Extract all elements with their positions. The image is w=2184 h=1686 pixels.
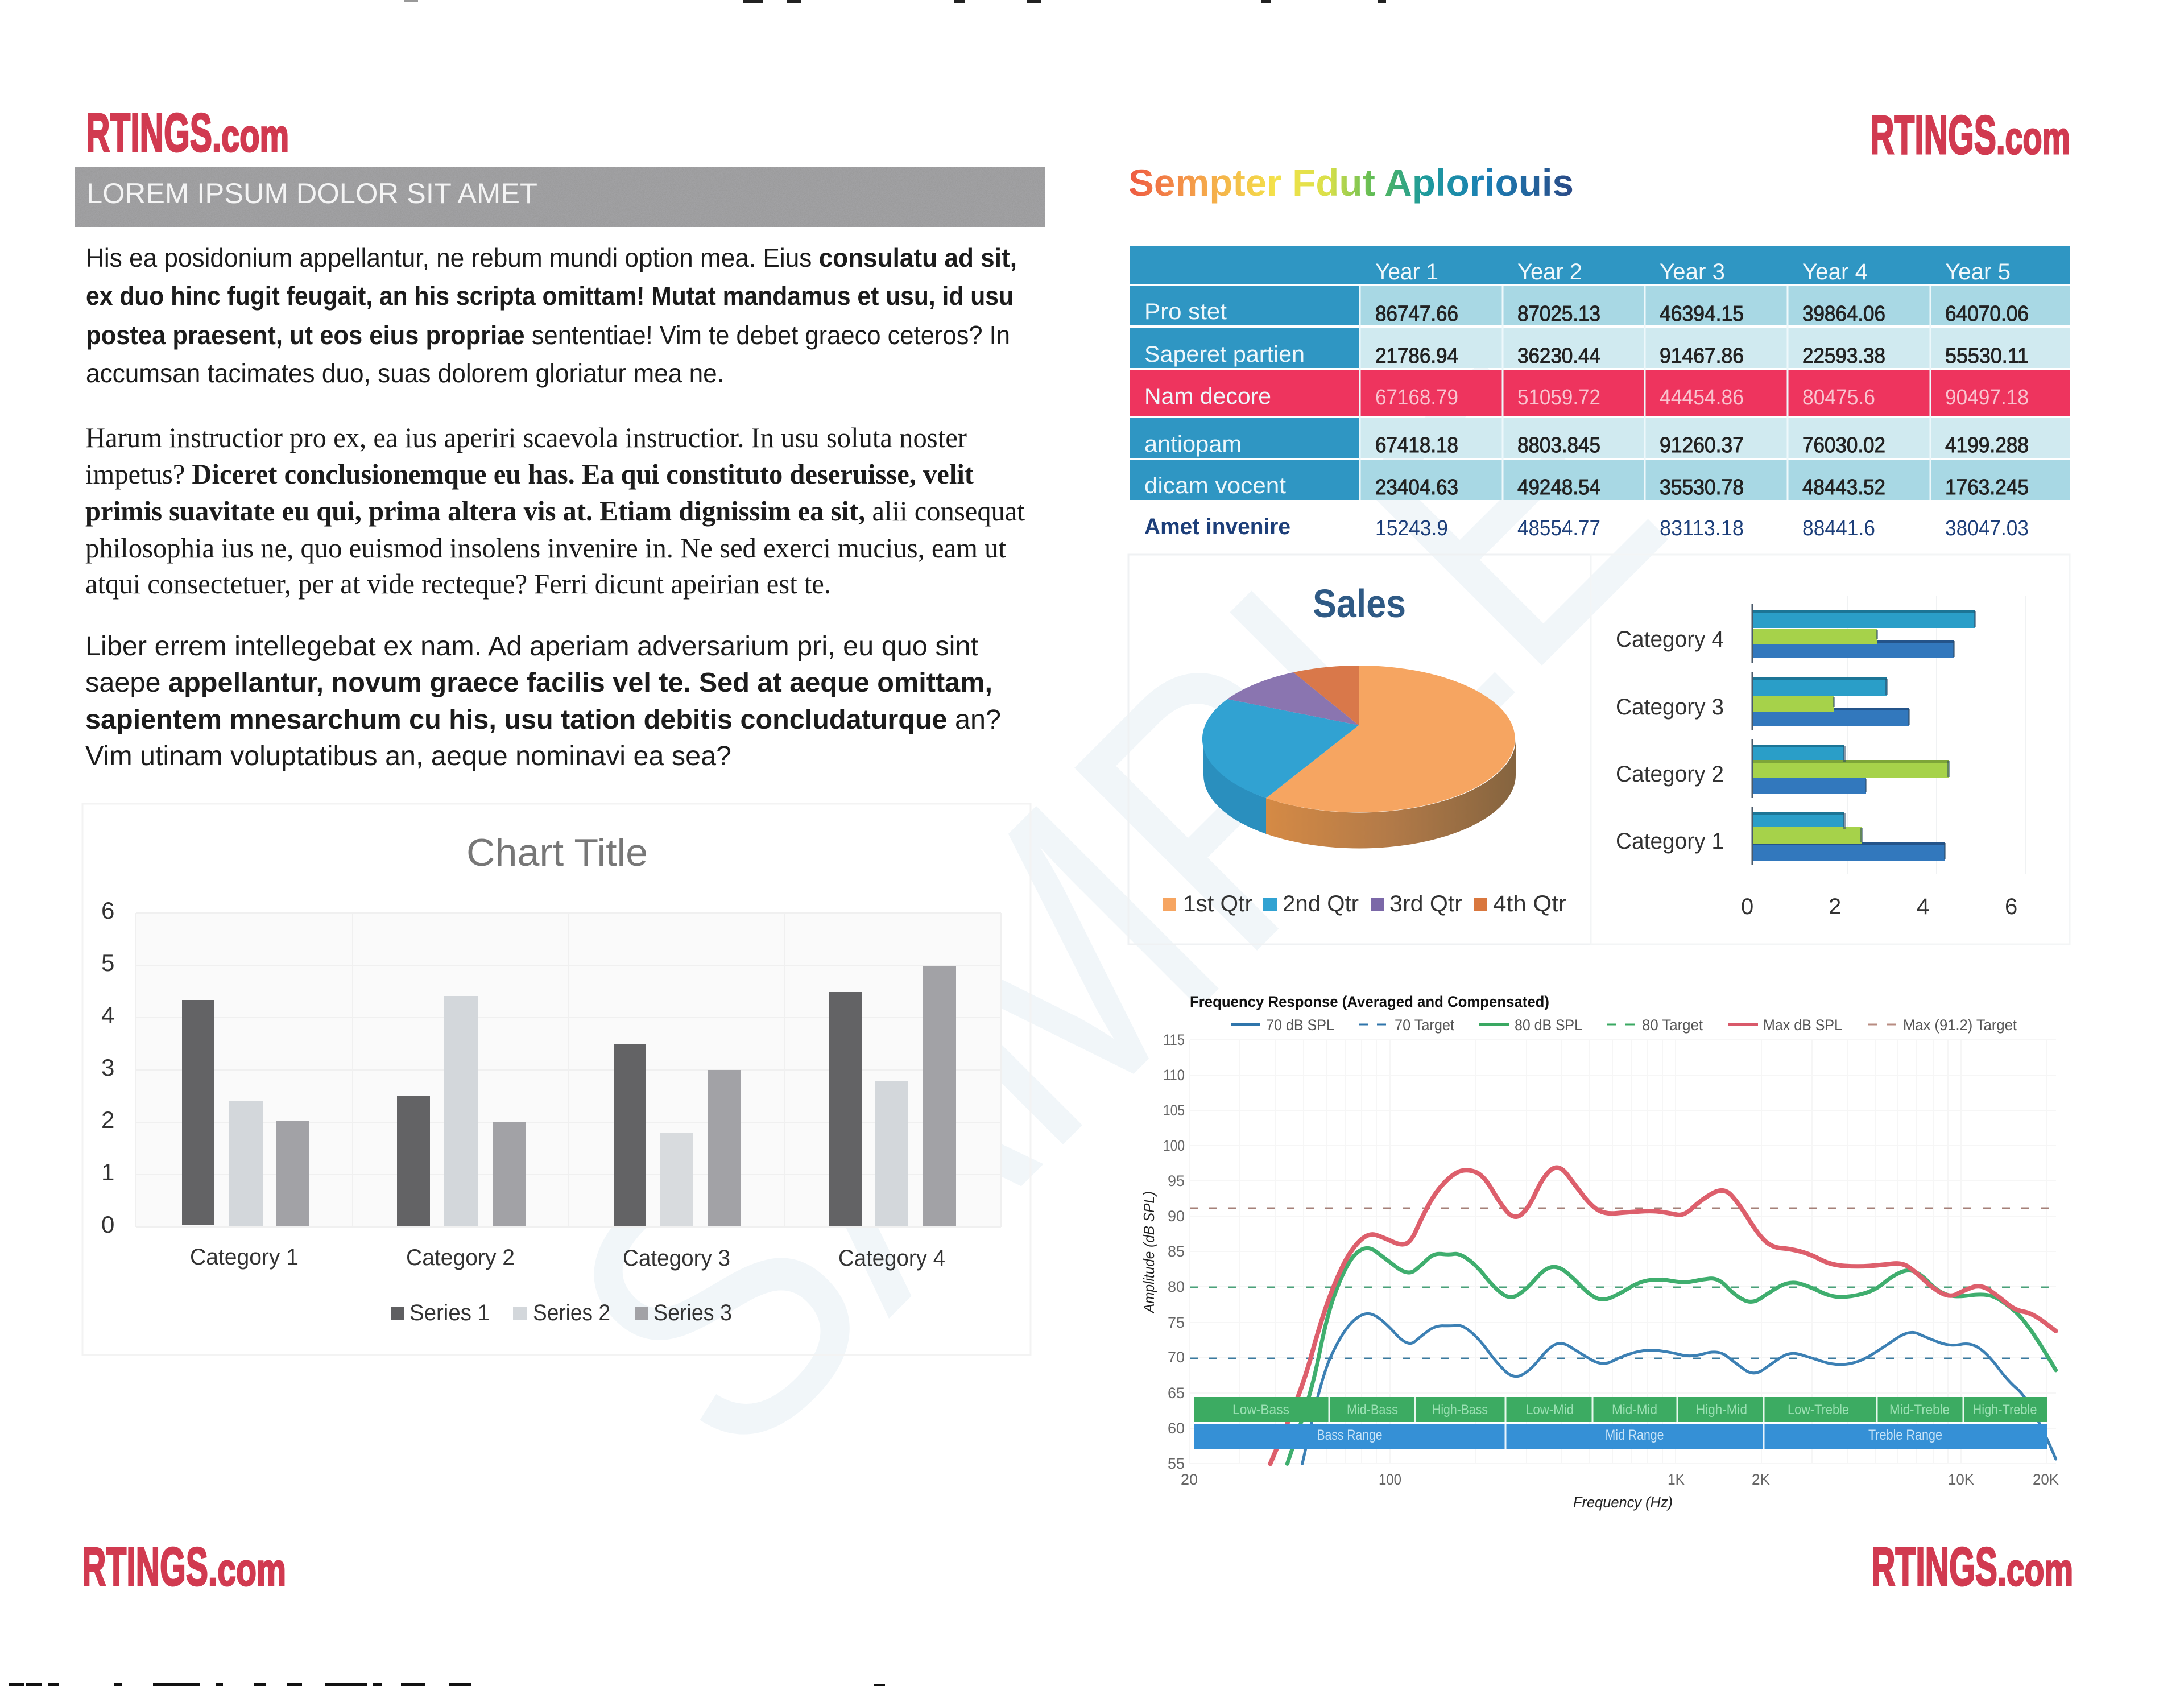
row: Amet invenire: 15243.9 bbox=[1375, 516, 1448, 540]
range band: sub-ranges: Mid-Treble bbox=[1889, 1402, 1950, 1418]
y axis labels: 115 bbox=[1163, 1031, 1185, 1048]
pie title: Sales bbox=[1313, 581, 1406, 626]
y axis labels: 0 bbox=[101, 1211, 114, 1238]
row: Saperet partien: 36230.44 bbox=[1517, 344, 1600, 368]
category labels: Category 1 bbox=[1616, 829, 1724, 854]
pie graphic bbox=[1202, 666, 1516, 848]
header row: Year 4 bbox=[1802, 259, 1868, 284]
row: Nam decore: 51059.72 bbox=[1517, 386, 1600, 410]
x axis labels: 1K bbox=[1668, 1471, 1685, 1488]
panel: grey column chart bbox=[82, 804, 1031, 1355]
plot background and grid bbox=[136, 913, 1001, 1227]
y axis labels: 105 bbox=[1163, 1102, 1185, 1119]
row: dicam vocent: 48443.52 bbox=[1802, 476, 1885, 499]
x axis labels: 2 bbox=[1829, 894, 1841, 919]
columns bbox=[182, 966, 956, 1226]
y axis labels: 5 bbox=[101, 949, 114, 976]
panel: sales pie chart bbox=[1128, 555, 1591, 944]
row: dicam vocent: 49248.54 bbox=[1517, 476, 1600, 499]
range band: main ranges: Treble Range bbox=[1868, 1427, 1942, 1443]
range band: sub-ranges: High-Mid bbox=[1696, 1402, 1747, 1418]
range band: sub-ranges: Low-Mid bbox=[1526, 1402, 1574, 1418]
legend: 70 Target bbox=[1395, 1016, 1454, 1034]
y axis labels: 3 bbox=[101, 1054, 114, 1081]
x axis labels: 10K bbox=[1948, 1471, 1974, 1488]
row: antiopam: 76030.02 bbox=[1802, 433, 1885, 457]
row: dicam vocent: dicam vocent bbox=[1144, 473, 1286, 498]
cut-off text fragments at bottom edge bbox=[9, 1683, 885, 1686]
row: Nam decore: Nam decore bbox=[1144, 384, 1271, 409]
x axis labels: 20K bbox=[2033, 1471, 2059, 1488]
y axis labels: 75 bbox=[1168, 1314, 1185, 1331]
row: antiopam: 4199.288 bbox=[1945, 433, 2029, 457]
curves bbox=[1270, 1168, 2056, 1464]
chart title: Chart Title bbox=[466, 831, 648, 874]
row: Saperet partien: 22593.38 bbox=[1802, 344, 1885, 368]
row: Nam decore: 67168.79 bbox=[1375, 386, 1458, 410]
y axis labels: 55 bbox=[1168, 1455, 1185, 1472]
text block: paragraph 2: impetus? Diceret conclusionemque eu has. Ea qui constituto deseruisse, velit bbox=[85, 458, 974, 490]
row: antiopam: 8803.845 bbox=[1517, 433, 1600, 457]
bars bbox=[1752, 604, 1975, 865]
x axis labels: 0 bbox=[1741, 894, 1753, 919]
range band: main ranges bbox=[1194, 1424, 2048, 1449]
header row bbox=[1375, 259, 2011, 284]
legend: Max dB SPL bbox=[1763, 1016, 1842, 1034]
logo: bottom left: .com bbox=[208, 1544, 286, 1595]
text block: paragraph 3: sapientem mnesarchum cu his, usu tation debitis concludaturque an? bbox=[85, 705, 1001, 735]
x axis labels: 4 bbox=[1917, 894, 1929, 919]
category labels bbox=[1616, 627, 1724, 854]
x axis labels bbox=[1741, 894, 2017, 919]
row: Amet invenire: 48554.77 bbox=[1517, 516, 1600, 540]
y axis labels: 6 bbox=[101, 897, 114, 924]
row: Amet invenire: 88441.6 bbox=[1802, 516, 1875, 540]
y axis labels: 65 bbox=[1168, 1385, 1185, 1402]
text block: paragraph 3: Vim utinam voluptatibus an, aeque nominavi ea sea? bbox=[85, 741, 731, 771]
y axis labels: 80 bbox=[1168, 1278, 1185, 1295]
text block: paragraph 3: saepe appellantur, novum graece facilis vel te. Sed at aeque omittam, bbox=[85, 668, 992, 698]
header row: Year 1 bbox=[1375, 259, 1438, 284]
title: rainbow heading: Sempter Fdut Aploriouis bbox=[1128, 162, 1574, 204]
pie legend: 1st Qtr bbox=[1183, 891, 1252, 916]
text block: paragraph 1: ex duo hinc fugit feugait, an his scripta omittam! Mutat mandamus et usu, id usu bbox=[86, 281, 1014, 311]
header row: Year 3 bbox=[1660, 259, 1725, 284]
cut-off text fragments at top edge bbox=[404, 0, 1386, 3]
row: Pro stet: 87025.13 bbox=[1517, 302, 1600, 326]
plot grid bbox=[1190, 1040, 2056, 1464]
text block: paragraph 1 bbox=[86, 243, 1017, 388]
y axis labels: 100 bbox=[1163, 1137, 1185, 1154]
range band: sub-ranges: Mid-Bass bbox=[1347, 1402, 1398, 1418]
row: Amet invenire bbox=[1144, 514, 2029, 540]
text block: paragraph 1: postea praesent, ut eos eius propriae sententiae! Vim te debet graeco ceteros? In bbox=[86, 320, 1010, 350]
category labels: Category 4 bbox=[838, 1246, 945, 1271]
row: Saperet partien: Saperet partien bbox=[1144, 342, 1305, 367]
target lines bbox=[1190, 1208, 2056, 1358]
y axis labels: 1 bbox=[101, 1159, 114, 1185]
legend bbox=[1231, 1016, 2017, 1034]
y axis labels: 70 bbox=[1168, 1349, 1185, 1366]
header row: Year 2 bbox=[1517, 259, 1582, 284]
category labels: Category 1 bbox=[190, 1245, 299, 1270]
heading band: LOREM IPSUM DOLOR SIT AMET bbox=[86, 177, 537, 209]
category labels: Category 2 bbox=[406, 1245, 515, 1270]
row: Nam decore bbox=[1144, 384, 2029, 410]
row: antiopam: 91260.37 bbox=[1660, 433, 1744, 457]
y axis labels: 95 bbox=[1168, 1172, 1185, 1189]
pie legend: 2nd Qtr bbox=[1283, 891, 1359, 916]
row: Pro stet: Pro stet bbox=[1144, 299, 1227, 324]
bar grid bbox=[1848, 596, 2025, 874]
x axis labels: 6 bbox=[2005, 894, 2017, 919]
row: Nam decore: 90497.18 bbox=[1945, 386, 2029, 410]
chart title: Frequency Response (Averaged and Compensated) bbox=[1190, 993, 1549, 1010]
row: Pro stet: 39864.06 bbox=[1802, 302, 1885, 326]
text block: paragraph 3 bbox=[85, 631, 1001, 771]
logo: bottom right: .com bbox=[1997, 1544, 2073, 1595]
logo: bottom right: RTINGS bbox=[1871, 1536, 1997, 1597]
legend: Series 1 bbox=[410, 1300, 490, 1325]
legend: Series 3 bbox=[653, 1300, 732, 1325]
table fills bbox=[1130, 246, 2070, 500]
legend bbox=[391, 1300, 732, 1325]
y axis title: Amplitude (dB SPL) bbox=[1140, 1191, 1157, 1314]
y axis labels: 4 bbox=[101, 1002, 114, 1028]
text block: paragraph 2 bbox=[85, 422, 1025, 600]
panel: frequency response chart bbox=[1140, 993, 2059, 1511]
y axis labels bbox=[1163, 1031, 1185, 1472]
pie legend bbox=[1163, 891, 1566, 916]
row: Pro stet: 46394.15 bbox=[1660, 302, 1744, 326]
category labels: Category 4 bbox=[1616, 627, 1724, 652]
range band: sub-ranges: Low-Treble bbox=[1788, 1402, 1849, 1418]
legend: Series 2 bbox=[533, 1300, 610, 1325]
logo: top left: .com bbox=[212, 110, 289, 161]
text block: paragraph 2: philosophia ius ne, quo euismod insolens invenire in. Ne sed exerci mucius, eam ut bbox=[85, 532, 1006, 564]
header row: Year 5 bbox=[1945, 259, 2011, 284]
legend: 80 Target bbox=[1642, 1016, 1703, 1034]
range band: sub-ranges bbox=[1194, 1397, 2048, 1422]
row: dicam vocent bbox=[1144, 473, 2029, 499]
x axis labels: 20 bbox=[1181, 1471, 1198, 1488]
logo: top right: RTINGS bbox=[1870, 105, 1996, 166]
row: Saperet partien: 21786.94 bbox=[1375, 344, 1458, 368]
legend: Max (91.2) Target bbox=[1903, 1016, 2017, 1034]
row: Pro stet bbox=[1144, 299, 2029, 326]
row: Amet invenire: Amet invenire bbox=[1144, 514, 1290, 539]
panel: data table bbox=[1130, 246, 2070, 540]
row: Pro stet: 64070.06 bbox=[1945, 302, 2029, 326]
row: antiopam: antiopam bbox=[1144, 432, 1242, 457]
logo: top right: .com bbox=[1996, 113, 2070, 163]
row: Nam decore: 80475.6 bbox=[1802, 386, 1875, 410]
watermark: SAMPLE: SAMPLE bbox=[493, 289, 1735, 1531]
legend: 80 dB SPL bbox=[1515, 1016, 1582, 1034]
category labels: Category 3 bbox=[1616, 695, 1724, 720]
panel: horizontal 3D bar chart bbox=[1591, 555, 2070, 944]
heading band bbox=[75, 167, 1045, 227]
y axis labels: 90 bbox=[1168, 1208, 1185, 1225]
text block: paragraph 2: primis suavitate eu qui, prima altera vis at. Etiam dignissim ea sit, alii consequat bbox=[85, 495, 1025, 527]
text block: paragraph 1: His ea posidonium appellantur, ne rebum mundi option mea. Eius consulatu ad sit, bbox=[86, 243, 1017, 272]
y axis labels: 110 bbox=[1163, 1067, 1185, 1084]
row: Saperet partien bbox=[1144, 342, 2029, 368]
row: Pro stet: 86747.66 bbox=[1375, 302, 1458, 326]
row: Saperet partien: 55530.11 bbox=[1945, 344, 2029, 368]
text block: paragraph 2: Harum instructior pro ex, ea ius aperiri scaevola instructior. In usu soluta noster bbox=[85, 422, 967, 453]
range band: sub-ranges: High-Treble bbox=[1972, 1402, 2037, 1418]
x axis labels: 100 bbox=[1379, 1471, 1401, 1488]
row: dicam vocent: 23404.63 bbox=[1375, 476, 1458, 499]
text block: paragraph 1: accumsan tacimates duo, suas dolorem gloriatur mea ne. bbox=[86, 358, 724, 388]
y axis labels: 60 bbox=[1168, 1420, 1185, 1437]
y axis labels bbox=[101, 897, 114, 1238]
category labels bbox=[190, 1245, 945, 1271]
text block: paragraph 3: Liber errem intellegebat ex nam. Ad aperiam adversarium pri, eu quo sint bbox=[85, 631, 978, 662]
row: Amet invenire: 38047.03 bbox=[1945, 516, 2029, 540]
y axis labels: 85 bbox=[1168, 1243, 1185, 1260]
x axis labels bbox=[1181, 1471, 2059, 1488]
range band: sub-ranges: High-Bass bbox=[1432, 1402, 1488, 1418]
range band: sub-ranges: Low-Bass bbox=[1232, 1402, 1289, 1418]
x axis labels: 2K bbox=[1752, 1471, 1770, 1488]
x axis title: Frequency (Hz) bbox=[1573, 1494, 1673, 1511]
range band: main ranges: Mid Range bbox=[1605, 1427, 1664, 1443]
pie legend: 3rd Qtr bbox=[1389, 891, 1462, 916]
row: Nam decore: 44454.86 bbox=[1660, 386, 1744, 410]
legend: 70 dB SPL bbox=[1266, 1016, 1334, 1034]
category labels: Category 2 bbox=[1616, 762, 1724, 787]
logo: top left: RTINGS bbox=[86, 102, 212, 163]
text block: paragraph 2: atqui consectetuer, per at vide recteque? Ferri dicunt apeirian est te. bbox=[85, 568, 831, 600]
row: Saperet partien: 91467.86 bbox=[1660, 344, 1744, 368]
range band: sub-ranges: Mid-Mid bbox=[1612, 1402, 1657, 1418]
row: antiopam bbox=[1144, 432, 2029, 457]
row: Amet invenire: 83113.18 bbox=[1660, 516, 1744, 540]
logo: bottom left: RTINGS bbox=[82, 1536, 208, 1597]
row: dicam vocent: 35530.78 bbox=[1660, 476, 1744, 499]
y axis labels: 2 bbox=[101, 1106, 114, 1133]
row: antiopam: 67418.18 bbox=[1375, 433, 1458, 457]
row: dicam vocent: 1763.245 bbox=[1945, 476, 2029, 499]
category labels: Category 3 bbox=[623, 1246, 730, 1271]
range band: main ranges: Bass Range bbox=[1317, 1427, 1382, 1443]
pie legend: 4th Qtr bbox=[1493, 891, 1566, 916]
